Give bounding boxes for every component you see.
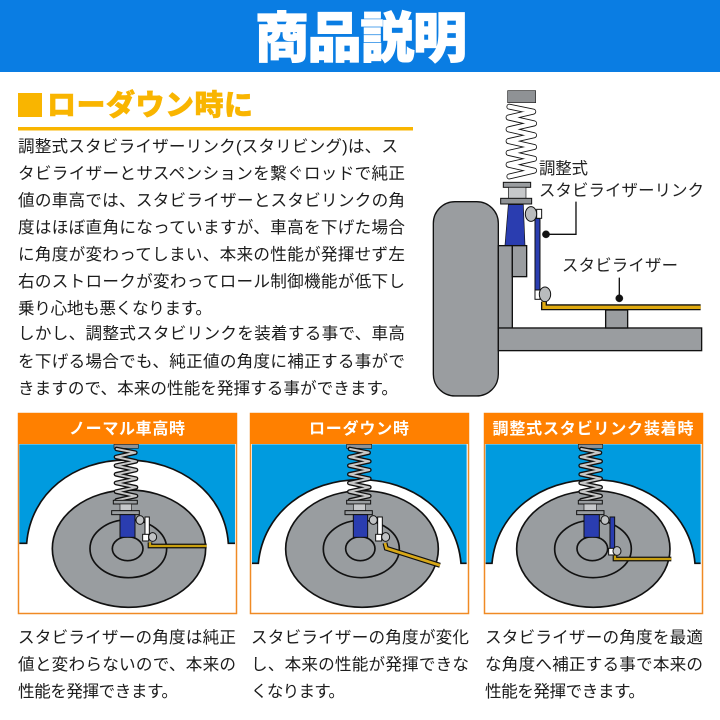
adjustable stabilizer link	[525, 207, 551, 302]
panel heading: ノーマル車高時	[69, 419, 185, 438]
lower arm and upright	[498, 246, 702, 351]
body text block: 値の車高では、スタビライザーとスタビリンクの角	[18, 191, 405, 210]
header band with title: 商品説明	[255, 9, 467, 69]
shock absorber	[505, 205, 525, 245]
section heading	[18, 88, 413, 130]
icon: tire	[433, 202, 498, 396]
body text block: きますので、本来の性能を発揮する事ができます。	[18, 379, 398, 398]
caption: lowered: スタビライザーの角度が変化	[251, 628, 469, 647]
coil spring	[501, 91, 536, 204]
body text block: 調整式スタビライザーリンク(スタリビング)は、ス	[18, 137, 398, 156]
leader lines	[542, 202, 623, 302]
body text block: タビライザーとサスペンションを繋ぐロッドで純正	[18, 164, 405, 183]
caption: adjustable link installed: スタビライザーの角度を最適	[485, 628, 703, 647]
body text block: に角度が変わってしまい、本来の性能が発揮せず左	[18, 245, 405, 264]
body text block	[18, 137, 405, 398]
suspension diagram	[433, 91, 704, 396]
caption: lowered	[251, 628, 469, 701]
section heading: ローダウン時に	[47, 88, 253, 122]
caption: adjustable link installed	[485, 628, 703, 701]
caption: adjustable link installed: な角度へ補正する事で本来の	[485, 655, 703, 674]
labels: スタビライザーリンク	[539, 182, 704, 200]
body text block: 度はほぼ直角になっていますが、車高を下げた場合	[18, 218, 405, 237]
body text block: しかし、調整式スタビリンクを装着する事で、車高	[18, 324, 405, 343]
panel heading	[484, 413, 703, 444]
body text block: 乗り心地も悪くなります。	[18, 299, 212, 318]
stabilizer bar	[544, 302, 701, 307]
caption: lowered: し、本来の性能が発揮できな	[251, 655, 469, 674]
labels: 調整式	[539, 160, 588, 178]
labels: スタビライザー	[562, 257, 678, 275]
body text block: 右のストロークが変わってロール制御機能が低下し	[18, 272, 405, 291]
panel heading: ローダウン時	[309, 419, 409, 438]
caption: normal ride height: 性能を発揮できます。	[18, 682, 178, 701]
caption: normal ride height: スタビライザーの角度は純正	[18, 628, 236, 647]
body text block: を下げる場合でも、純正値の角度に補正する事がで	[18, 352, 405, 371]
panel: normal ride height	[18, 413, 237, 614]
header band with title	[0, 0, 720, 72]
panel: lowered	[250, 413, 469, 614]
caption: normal ride height	[18, 628, 236, 701]
caption: lowered: くなります。	[251, 682, 345, 701]
caption: adjustable link installed: 性能を発揮できます。	[485, 682, 645, 701]
panel heading	[250, 413, 469, 444]
panel heading: 調整式スタビリンク装着時	[492, 419, 694, 438]
labels	[539, 160, 704, 275]
panel: adjustable link installed	[484, 413, 703, 614]
caption: normal ride height: 値と変わらないので、本来の	[18, 655, 236, 674]
panel heading	[18, 413, 237, 444]
